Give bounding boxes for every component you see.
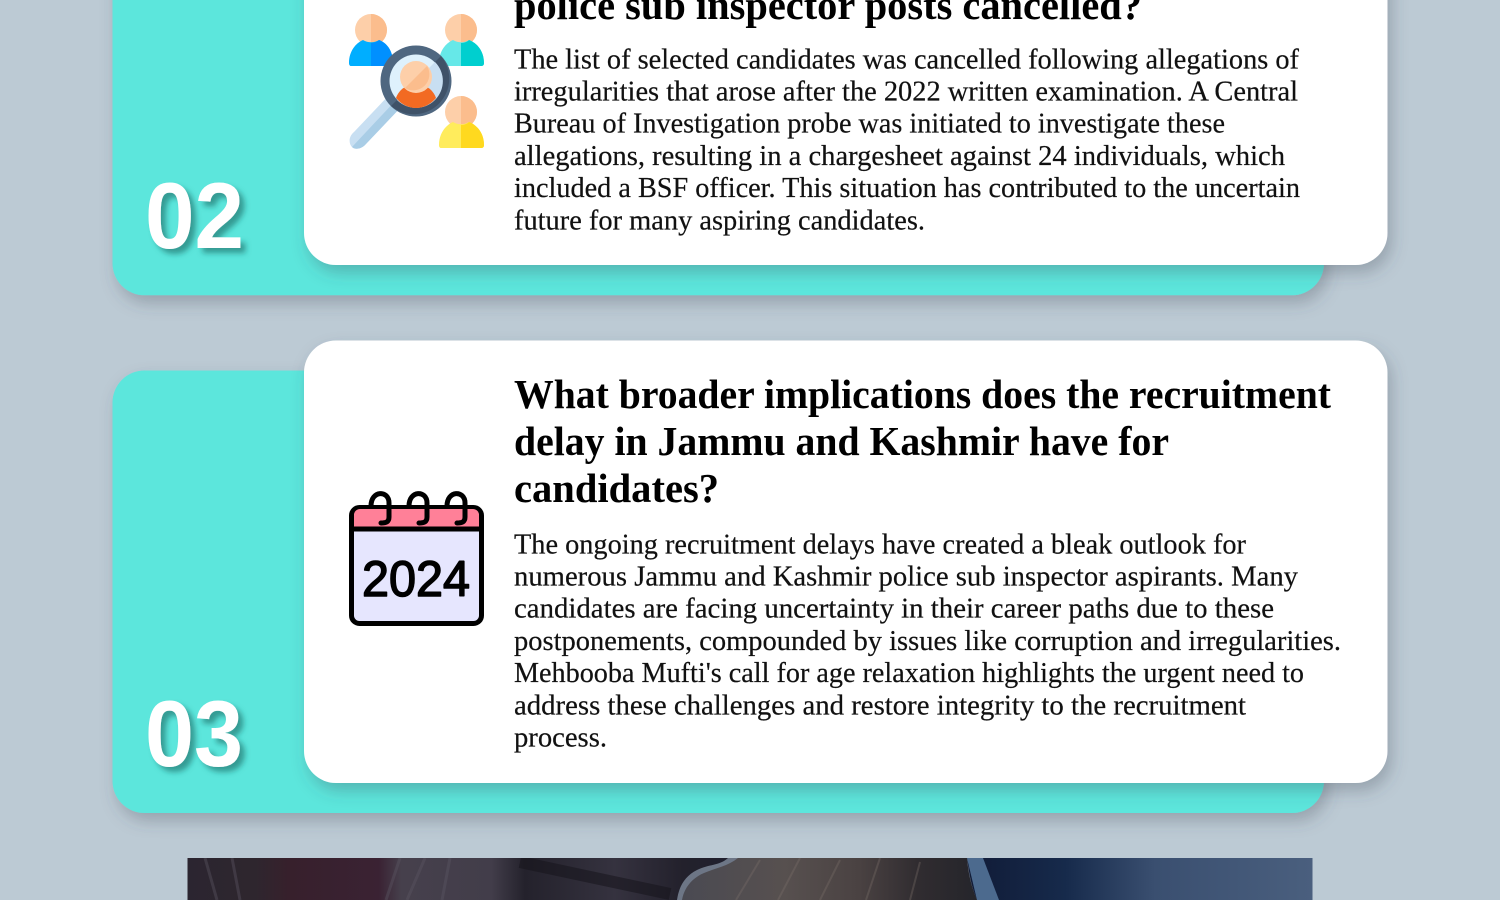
number 02: 02 xyxy=(145,163,244,268)
body text 03: Mehbooba Mufti's call for age relaxation highlights the urgent need to xyxy=(514,658,1304,689)
teal backing card 03 xyxy=(112,370,1324,813)
number 03: 03 xyxy=(145,681,243,786)
heading 03: What broader implications does the recruitment xyxy=(514,371,1331,417)
icon: magnifying glass over people xyxy=(349,14,484,149)
body text 02: included a BSF officer. This situation has contributed to the uncertain xyxy=(514,173,1300,204)
body text 02: irregularities that arose after the 2022 written examination. A Central xyxy=(514,76,1298,108)
body text 03: The ongoing recruitment delays have created a bleak outlook for xyxy=(514,529,1247,560)
body text 02: Bureau of Investigation probe was initiated to investigate these xyxy=(514,109,1225,140)
body text 03 xyxy=(514,529,1341,754)
white card 02 xyxy=(304,0,1388,265)
heading 03: candidates? xyxy=(514,465,719,511)
icon: 2024 calendar xyxy=(351,494,482,624)
teal backing card 02 xyxy=(112,0,1324,295)
panel: question 02 xyxy=(112,0,1388,295)
body text 03: postponements, compounded by issues like corruption and irregularities. xyxy=(514,626,1341,657)
body text 03: address these challenges and restore integrity to the recruitment xyxy=(514,690,1246,721)
body text 03: numerous Jammu and Kashmir police sub inspector aspirants. Many xyxy=(514,562,1298,592)
photo strip xyxy=(188,858,1312,900)
heading 03: delay in Jammu and Kashmir have for xyxy=(514,418,1169,464)
body text 03: candidates are facing uncertainty in their career paths due to these xyxy=(514,594,1274,625)
body text 02: allegations, resulting in a chargesheet against 24 individuals, which xyxy=(514,141,1285,172)
body text 02 xyxy=(514,44,1300,236)
icon: 2024 calendar: 2024 xyxy=(362,551,470,607)
white card 03 xyxy=(304,340,1388,783)
body text 03: process. xyxy=(514,723,607,754)
body text 02: future for many aspiring candidates. xyxy=(514,205,925,236)
body text 02: The list of selected candidates was cancelled following allegations of xyxy=(514,44,1300,75)
heading 03 xyxy=(514,371,1331,511)
panel: question 03 xyxy=(112,340,1388,813)
